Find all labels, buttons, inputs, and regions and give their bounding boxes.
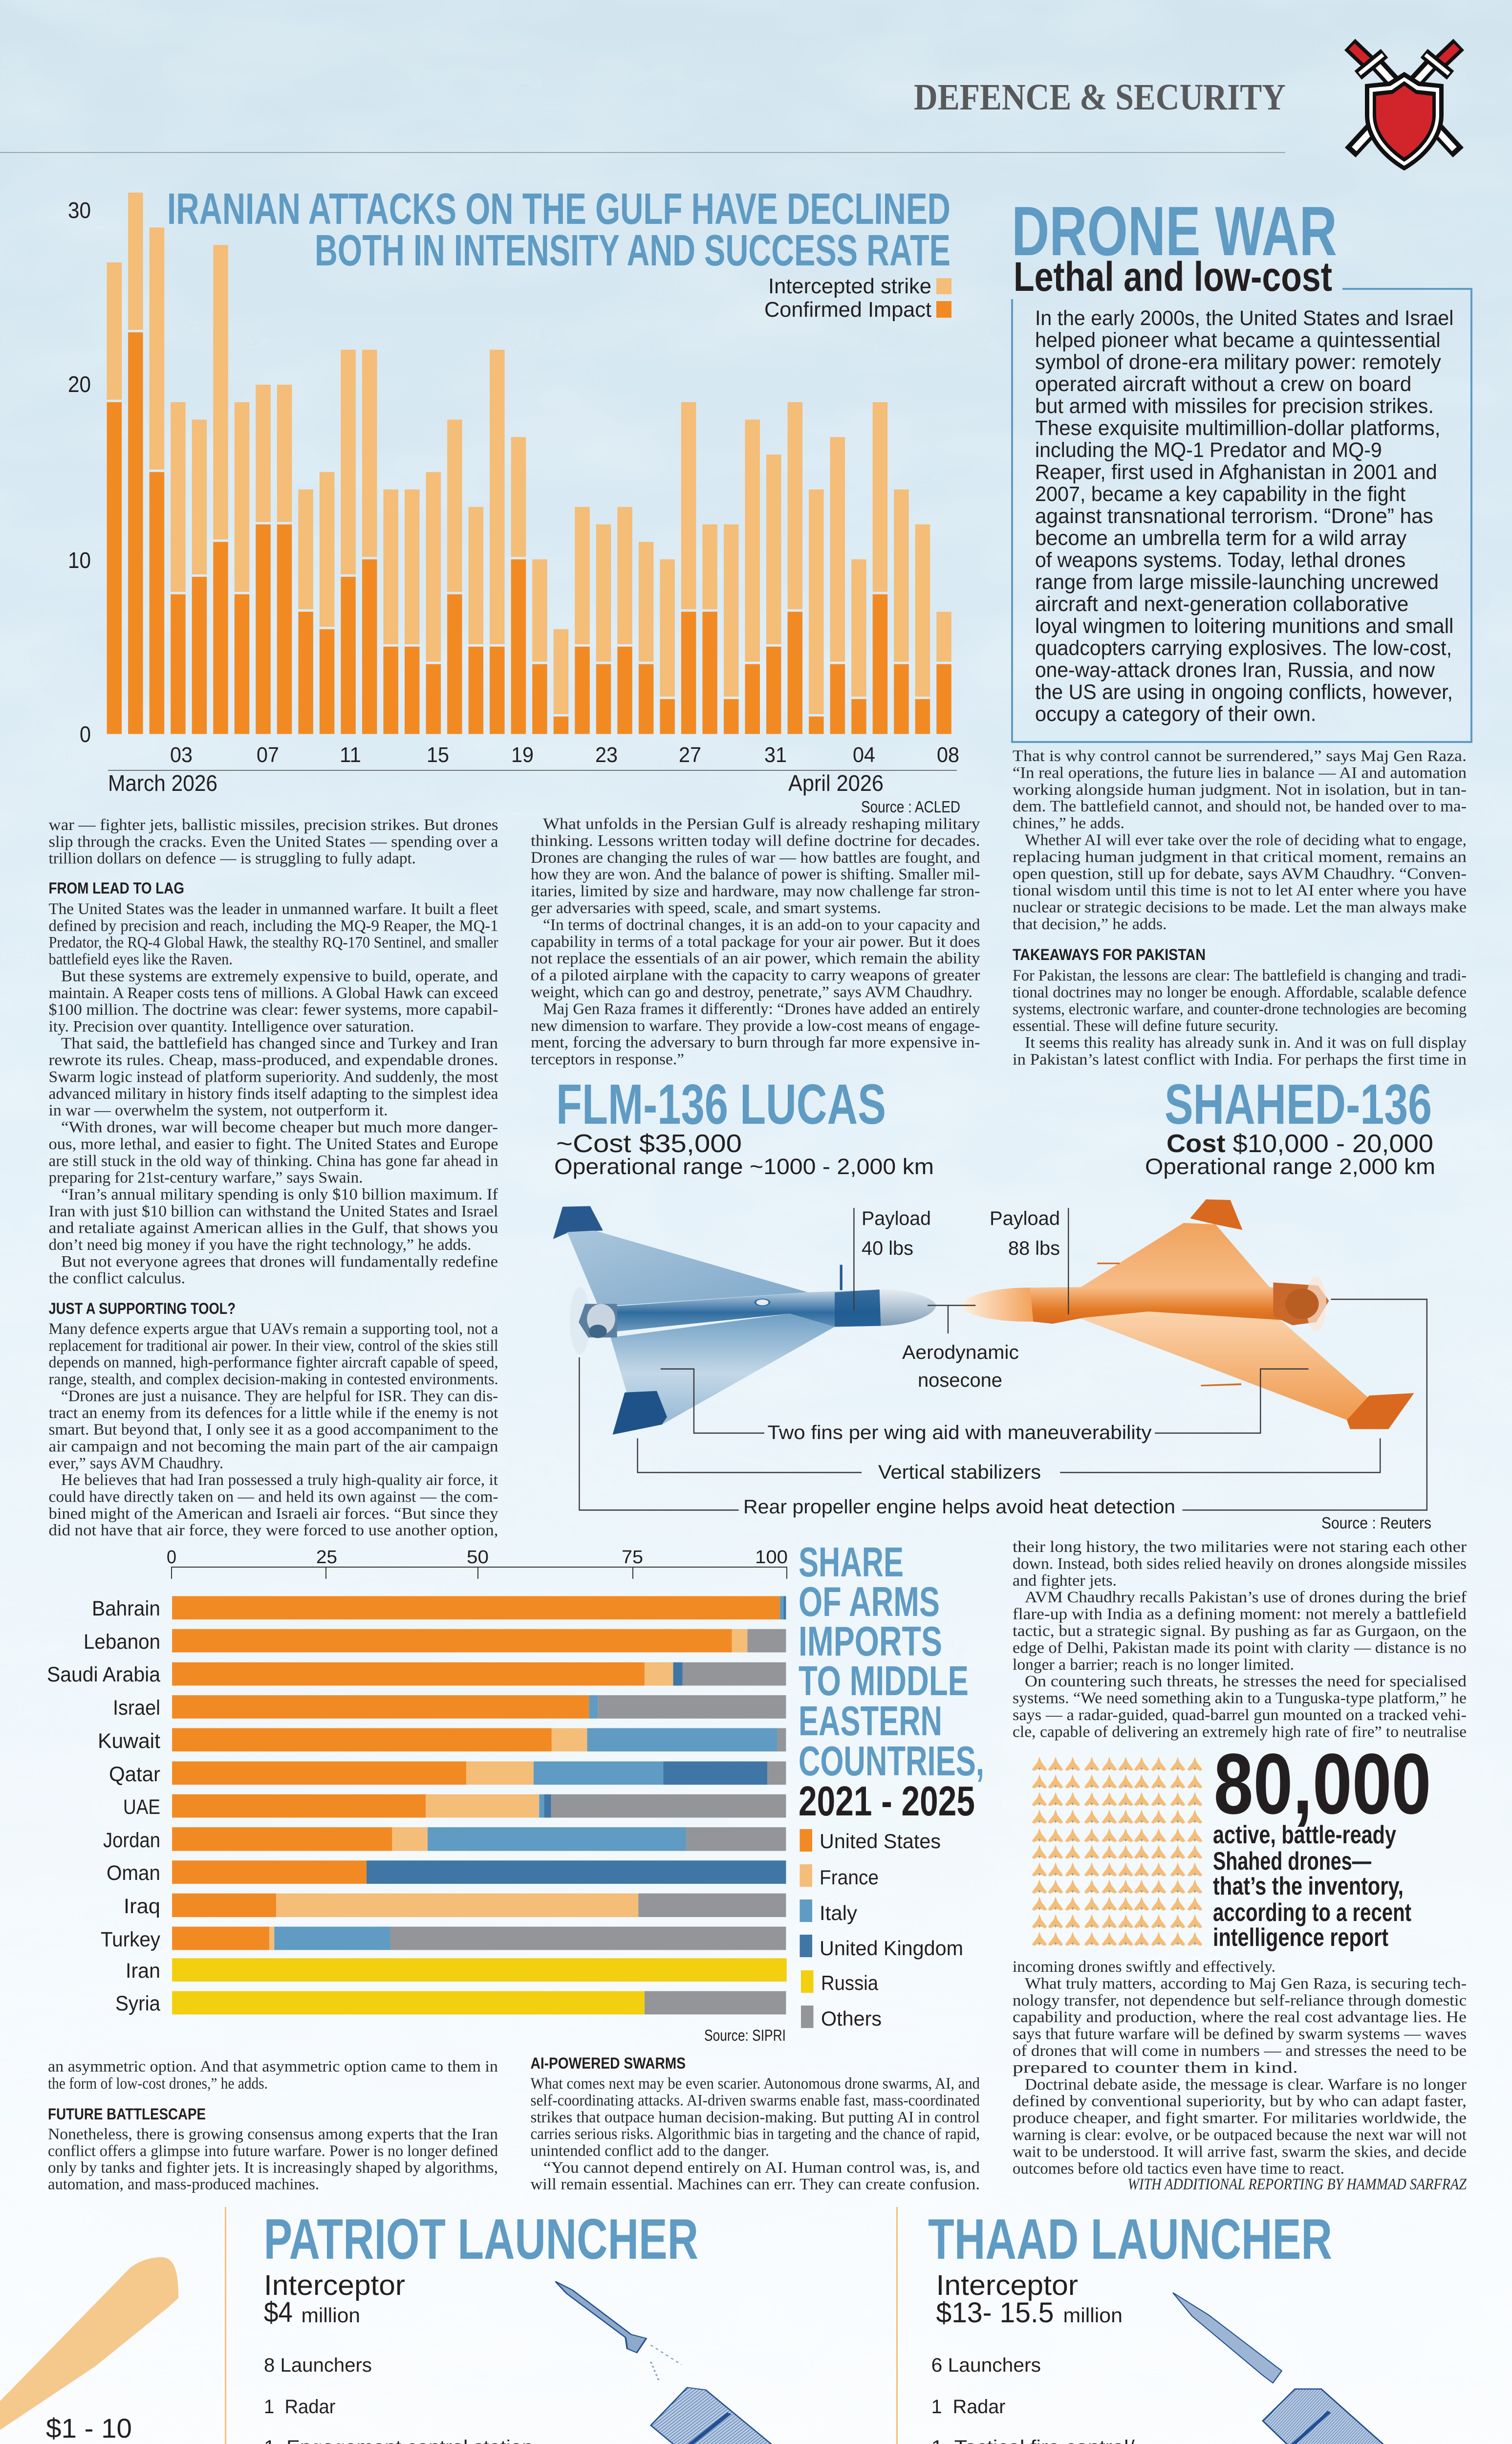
text block: column 3 upper article: dem. The battlefield cannot, and should not, be handed over to ma-	[1013, 798, 1467, 815]
intro text: but armed with missiles for precision strikes.	[1035, 394, 1434, 418]
text block: column 2 lower article: “You cannot depend entirely on AI. Human control was, is, and	[543, 2159, 980, 2177]
panel: Patriot launcher	[253, 2207, 875, 2444]
text block: column 2 upper article: thinking. Lessons written today will define doctrine for decades.	[531, 832, 980, 850]
text block: column 1 upper article: “Drones are just a nuisance. They are helpful for ISR. They can dis-	[61, 1387, 498, 1405]
y axis labels: 30	[68, 197, 91, 223]
chart title: COUNTRIES,	[799, 1738, 984, 1785]
text block: column 3 middle article: down. Instead, both sides relied heavily on drones alongside missiles	[1013, 1555, 1467, 1572]
drone source: Source : Reuters	[1321, 1514, 1431, 1532]
intro text: helped pioneer what became a quintessential	[1035, 328, 1441, 352]
text block: column 1 upper article: in war — overwhelm the system, not outperform it.	[49, 1102, 388, 1119]
intro text: one-way-attack drones Iran, Russia, and now	[1035, 658, 1435, 682]
text block: column 2 lower article	[531, 2054, 980, 2193]
text block: column 1 upper article: But these systems are extremely expensive to build, operate, and	[61, 967, 498, 985]
subheading: future battlescape: FUTURE BATTLESCAPE	[48, 2105, 206, 2123]
text block: column 1 upper article: tract an enemy from its defences for a little while if the enemy is not	[49, 1404, 498, 1422]
intro text: the US are using in ongoing conflicts, however,	[1035, 680, 1453, 704]
intro text	[1035, 306, 1453, 726]
chart legend: France	[820, 1866, 879, 1889]
heading: Shahed-136 specs	[1145, 1072, 1435, 1179]
illustration: THAAD missile	[1173, 2292, 1282, 2383]
text block: column 3 upper article: working alongside human judgment. Not in isolation, but in tan-	[1013, 781, 1467, 799]
x axis date labels: 23	[595, 743, 618, 767]
text block: column 2 upper article: What unfolds in the Persian Gulf is already reshaping military	[543, 815, 980, 833]
battery components list	[264, 2355, 533, 2444]
text block: column 2 upper article: terceptors in response.”	[531, 1051, 684, 1069]
panel: drone comparison FLM-136 LUCAS vs Shahed-136	[553, 1072, 1435, 1532]
text block: column 3 upper article: That is why control cannot be surrendered,” says Maj Gen Raza.	[1013, 747, 1467, 765]
text block: column 3 upper article: in Pakistan’s latest conflict with India. For perhaps the first time in	[1013, 1051, 1467, 1069]
subheading: just a supporting tool: JUST A SUPPORTING TOOL?	[49, 1300, 236, 1317]
chart title: SHARE	[799, 1539, 904, 1586]
text block: column 2 upper article	[531, 815, 980, 1069]
bars: confirmed and intercepted strikes per day	[107, 193, 951, 734]
text block: column 2 lower article: self-coordinating attacks. AI-driven swarms enable fast, mass-coordinated	[531, 2092, 980, 2109]
heading: FLM-136 LUCAS specs	[554, 1072, 934, 1179]
text block: column 3 lower article	[1013, 1958, 1467, 2193]
intro text: of weapons systems. Today, lethal drones	[1035, 548, 1405, 572]
text block: column 3 middle article: AVM Chaudhry recalls Pakistan’s use of drones during the brief	[1025, 1589, 1467, 1606]
text block: column 3 middle article	[1013, 1538, 1467, 1741]
country labels: Bahrain	[92, 1597, 160, 1620]
text block: column 3 middle article: systems. “We need something akin to a Tunguska-type platform,” he	[1013, 1690, 1467, 1707]
text block: column 2 upper article: Maj Gen Raza frames it differently: “Drones have added an entirely	[543, 1000, 980, 1018]
text block: column 3 lower article: warning is clear: evolve, or be outpaced because the next war will not	[1013, 2126, 1467, 2144]
text block: column 1 lower article: automation, and mass-produced machines.	[48, 2176, 319, 2193]
text block: column 1 upper article: did not have that air force, they were forced to use another option,	[49, 1522, 498, 1539]
intro text: range from large missile-launching uncrewed	[1035, 570, 1439, 594]
heading: PATRIOT LAUNCHER	[264, 2207, 698, 2271]
text block: column 3 upper article: open question, still up for debate, says AVM Chaudhry. “Conven-	[1013, 865, 1467, 883]
chart source: Source : ACLED	[861, 798, 960, 816]
text block: column 1 upper article: Many defence experts argue that UAVs remain a supporting tool, not a	[49, 1320, 498, 1338]
chart title: OF ARMS	[799, 1579, 940, 1625]
callout text: that’s the inventory,	[1213, 1872, 1404, 1900]
chart title: IRANIAN ATTACKS ON THE GULF HAVE DECLINED	[167, 185, 950, 234]
subtitle: Lethal and low-cost	[1014, 254, 1332, 300]
chart legend: Intercepted strike	[768, 274, 931, 298]
y axis labels: 20	[68, 371, 91, 397]
country labels: Qatar	[109, 1763, 160, 1786]
text block: column 2 upper article: ment, forcing the adversary to burn through far more expensive in-	[531, 1034, 980, 1051]
x axis date labels: 03	[170, 743, 193, 767]
callout text	[1213, 1821, 1411, 1952]
intro text: In the early 2000s, the United States and Israel	[1035, 306, 1453, 330]
chart title: 2021 - 2025	[799, 1778, 975, 1825]
intro text: Reaper, first used in Afghanistan in 2001 and	[1035, 460, 1437, 484]
panel: laser beam cost	[0, 2257, 178, 2444]
text block: column 2 lower article: strikes that outpace human decision-making. But putting AI in control	[531, 2109, 980, 2126]
y axis labels: 10	[68, 547, 91, 573]
stacked horizontal bars by supplier	[172, 1596, 787, 2014]
text block: column 1 upper article: The United States was the leader in unmanned warfare. It built a fleet	[49, 900, 498, 918]
text block: column 3 upper article: essential. These will define future security.	[1013, 1017, 1278, 1035]
chart legend: Russia	[821, 1971, 879, 1994]
chart legend: United States	[820, 1830, 941, 1853]
label: aerodynamic nosecone	[902, 1342, 1019, 1391]
icon: shield and crossed swords	[1350, 44, 1459, 171]
text block: column 1 upper article: maintain. A Reaper costs tens of millions. A Global Hawk can exceed	[49, 984, 498, 1002]
chart title: IMPORTS	[799, 1618, 942, 1665]
label: rear propeller: Rear propeller engine helps avoid heat detection	[743, 1496, 1175, 1518]
text block: column 2 upper article: of a piloted airplane with the capacity to carry weapons of greater	[531, 967, 980, 984]
illustration: Patriot launcher vehicle	[253, 2387, 875, 2444]
callout text: according to a recent	[1213, 1898, 1411, 1927]
intro text: operated aircraft without a crew on board	[1035, 372, 1411, 396]
text block: column 1 upper article: ever,” says AVM Chaudhry.	[49, 1455, 223, 1472]
text block: column 3 lower article: outcomes before old tactics even have time to react.	[1013, 2160, 1344, 2178]
text block: column 1 upper article: are still stuck in the old way of thinking. China has gone far ahead in	[49, 1152, 498, 1170]
text block: column 3 middle article: longer a barrier; reach is no longer limited.	[1013, 1656, 1294, 1674]
text block: column 1 upper article: bined might of the American and Israeli air forces. “But since they	[49, 1505, 498, 1523]
leader lines	[579, 1208, 1427, 1510]
text block: column 3 lower article: says that future warfare will be defined by swarm systems — waves	[1013, 2026, 1467, 2043]
subheading: AI-powered swarms: AI-POWERED SWARMS	[531, 2054, 686, 2072]
text block: column 1 upper article: trillion dollars on defence — is struggling to fully adapt.	[49, 850, 416, 868]
chart axis: 100	[755, 1547, 788, 1568]
illustration: blue LUCAS drone	[553, 1206, 936, 1435]
x axis date labels: April 2026	[788, 770, 884, 796]
label: payload 88 lbs: 88 lbs	[1008, 1238, 1060, 1259]
divider: orange rule left	[225, 2207, 226, 2444]
text block: column 1 upper article: and retaliate against American allies in the Gulf, that shows you	[49, 1220, 498, 1237]
text block: column 3 upper article: replacing human judgment in that critical moment, remains an	[1013, 848, 1467, 866]
country labels: Kuwait	[98, 1729, 160, 1753]
text block: column 1 upper article: Predator, the RQ-4 Global Hawk, the stealthy RQ-170 Sentinel, and smaller	[49, 934, 498, 952]
intro text: symbol of drone-era military power: remotely	[1035, 350, 1441, 374]
text block: column 3 middle article: flare-up with India as a defining moment: not merely a battlefield	[1013, 1606, 1467, 1623]
text block: column 2 upper article: ger adversaries with speed, scale, and smart systems.	[531, 899, 881, 917]
heading: THAAD LAUNCHER	[928, 2207, 1332, 2271]
text block: column 3 lower article: defined by conventional superiority, but by who can adapt faster,	[1013, 2093, 1467, 2110]
big number: 80,000	[1214, 1736, 1431, 1832]
label: payload 40 lbs: Payload	[862, 1208, 931, 1229]
text block: column 1 upper article: don’t need big money if you have the right technology,” he adds.	[49, 1236, 471, 1254]
text block: column 3 middle article: tactic, but a strategic signal. By pushing as far as Gurgaon, on the	[1013, 1622, 1467, 1640]
interceptor cost	[264, 2269, 405, 2328]
x axis date labels: 31	[764, 743, 787, 767]
intro text: 2007, became a key capability in the fight	[1035, 482, 1405, 506]
label: payload 40 lbs: 40 lbs	[862, 1238, 913, 1259]
text block: column 3 upper article: “In real operations, the future lies in balance — AI and automation	[1013, 764, 1467, 782]
x axis date labels: 04	[853, 743, 875, 767]
heading: Shahed-136 specs: SHAHED-136	[1165, 1072, 1432, 1136]
text block: column 1 upper article: battlefield eyes like the Raven.	[49, 951, 233, 968]
panel: THAAD launcher	[908, 2207, 1465, 2444]
country labels: Lebanon	[84, 1630, 160, 1654]
country labels: Iraq	[124, 1895, 160, 1918]
text block: column 3 middle article: and fighter jets.	[1013, 1572, 1117, 1590]
battery components list: 8 Launchers	[264, 2355, 372, 2376]
label: vertical stabilizers: Vertical stabilizers	[878, 1462, 1041, 1483]
intro text: against transnational terrorism. “Drone” has	[1035, 504, 1433, 528]
text block: column 1 upper article: advanced military in history finds itself adapting to the simplest idea	[49, 1085, 498, 1103]
label: payload 88 lbs	[990, 1208, 1060, 1259]
subheading: takeaways for Pakistan: TAKEAWAYS FOR PAKISTAN	[1013, 946, 1206, 963]
country labels: UAE	[123, 1795, 160, 1819]
illustration: THAAD launcher vehicle	[908, 2389, 1465, 2444]
text block: column 1 lower article: only by tanks and fighter jets. It is increasingly shaped by algorithms,	[48, 2159, 498, 2177]
byline: WITH ADDITIONAL REPORTING BY HAMMAD SARFRAZ	[1128, 2176, 1467, 2193]
text block: column 2 upper article: new dimension to warfare. They provide a low-cost means of engage-	[531, 1017, 980, 1035]
callout text: intelligence report	[1213, 1923, 1388, 1952]
text block: column 3 upper article: tional doctrines may no longer be enough. Affordable, scalable defence	[1013, 983, 1467, 1001]
text block: column 1 upper article: slip through the cracks. Even the United States — spending over a	[49, 833, 498, 851]
text block: column 1 upper article: “Iran’s annual military spending is only $10 billion maximum. If	[61, 1186, 498, 1203]
text block: column 1 lower article: conflict offers a glimpse into future warfare. Power is no longer defined	[48, 2142, 498, 2160]
text block: column 3 lower article: nology transfer, not dependence but self-reliance through domestic	[1013, 1992, 1467, 2009]
chart legend: Italy	[820, 1901, 857, 1924]
divider: orange rule right	[896, 2207, 898, 2444]
text block: column 2 upper article: itaries, limited by size and hardware, may now challenge far stron-	[531, 883, 980, 900]
chart title	[167, 185, 950, 275]
heading: FLM-136 LUCAS specs: Operational range ~1000 - 2,000 km	[554, 1154, 934, 1179]
panel: 80,000 Shahed drones callout	[1032, 1736, 1431, 1952]
text block: column 2 lower article: will remain essential. Machines can err. They can create confusion.	[531, 2176, 980, 2193]
text block: column 2 lower article: What comes next may be even scarier. Autonomous drone swarms, AI, and	[531, 2075, 980, 2093]
label: two fins: Two fins per wing aid with maneuverability	[767, 1422, 1151, 1443]
y axis labels: 0	[80, 721, 91, 747]
text block: column 3 upper article: nuclear or strategic decisions to be made. Let the man always make	[1013, 899, 1467, 916]
text block: column 3 upper article: that decision,” he adds.	[1013, 916, 1167, 933]
text block: column 2 lower article: carries serious risks. Algorithmic bias in targeting and the chance of rapid,	[531, 2125, 980, 2143]
callout text: Shahed drones—	[1213, 1847, 1371, 1876]
battery components list: 6 Launchers	[931, 2355, 1041, 2376]
text block: column 1 lower article: the form of low-cost drones,” he adds.	[48, 2075, 268, 2093]
callout text: active, battle-ready	[1213, 1821, 1396, 1849]
text block: column 2 upper article: how they are won. And the balance of power is shifting. Smaller mil-	[531, 866, 980, 883]
text block: column 3 middle article: cle, capable of delivering an extremely high rate of fire” to neutralise	[1013, 1723, 1467, 1741]
battery components list: 1 Radar	[931, 2396, 1006, 2418]
panel: share of arms imports chart	[47, 1539, 984, 2044]
laser cost text	[46, 2413, 178, 2444]
laser cost text: $1 - 10	[46, 2413, 132, 2444]
chart title	[799, 1539, 984, 1825]
x axis date labels: March 2026	[108, 770, 217, 796]
text block: column 1 upper article: air campaign and not becoming the main part of the air campaign	[49, 1438, 498, 1456]
interceptor cost	[936, 2269, 1123, 2329]
header title: DEFENCE & SECURITY	[914, 77, 1286, 118]
interceptor cost: million	[1063, 2304, 1123, 2327]
interceptor cost: $13- 15.5	[936, 2297, 1054, 2329]
text block: column 1 upper article: “With drones, war will become cheaper but much more danger-	[61, 1119, 498, 1136]
intro text: aircraft and next-generation collaborative	[1035, 592, 1408, 616]
illustration: orange Shahed drone	[961, 1200, 1414, 1429]
battery components list	[931, 2355, 1173, 2444]
interceptor cost: Interceptor	[264, 2269, 405, 2301]
label: payload 88 lbs: Payload	[990, 1208, 1060, 1229]
chart axis: 50	[467, 1547, 489, 1568]
interceptor cost: $4	[264, 2296, 293, 2328]
main title: DRONE WAR	[1012, 193, 1337, 270]
text block: column 1 upper article: the conflict calculus.	[49, 1270, 185, 1287]
panel: Iranian attacks stacked bar chart	[68, 185, 960, 816]
text block: column 2 upper article: not replace the essentials of an air power, which remain the ability	[531, 950, 980, 967]
x axis date labels: 07	[257, 743, 279, 767]
chart legend	[764, 274, 951, 322]
chart title: BOTH IN INTENSITY AND SUCCESS RATE	[315, 226, 950, 275]
chart legend: United Kingdom	[820, 1937, 963, 1960]
country labels	[47, 1597, 160, 2015]
panel: Drone War intro box	[1012, 193, 1471, 742]
intro text: including the MQ-1 Predator and MQ-9	[1035, 438, 1382, 462]
text block: column 1 upper article: But not everyone agrees that drones will fundamentally redefine	[61, 1253, 498, 1270]
text block: column 1 upper article: That said, the battlefield has changed since and Turkey and Iran	[61, 1035, 498, 1052]
chart axis: 75	[622, 1547, 643, 1568]
text block: column 3 lower article: prepared to counter them in kind.	[1013, 2059, 1298, 2076]
text block: column 1 upper article: Iran with just $10 billion can withstand the United States and Israel	[49, 1202, 498, 1220]
text block: column 3 lower article: of drones that will come in numbers — and stresses the need to be	[1013, 2042, 1467, 2060]
text block: column 3 lower article: produce cheaper, and fight smarter. For militaries worldwide, the	[1013, 2110, 1467, 2127]
battery components list: 1 Radar	[264, 2396, 335, 2418]
text block: column 3 upper article: It seems this reality has already sunk in. And it was on full display	[1025, 1034, 1467, 1052]
intro text: become an umbrella term for a wild array	[1035, 526, 1407, 550]
text block: column 3 lower article: wait to be understood. It will arrive fast, swarm the skies, and decide	[1013, 2143, 1467, 2160]
text block: column 1 upper article: preparing for 21st-century warfare,” says Swain.	[49, 1169, 363, 1187]
country labels: Saudi Arabia	[47, 1663, 160, 1686]
country labels: Oman	[107, 1861, 160, 1885]
interceptor cost: Interceptor	[936, 2269, 1078, 2301]
chart source: Source: SIPRI	[704, 2027, 786, 2044]
x axis date labels	[108, 743, 959, 796]
text block: column 2 upper article: “In terms of doctrinal changes, it is an add-on to your capacity and	[543, 916, 980, 934]
text block: column 1 lower article: an asymmetric option. And that asymmetric option came to them in	[48, 2058, 498, 2075]
text block: column 1 upper article: defined by precision and reach, including the MQ-9 Reaper, the MQ-1	[49, 917, 498, 935]
x axis date labels: 19	[511, 743, 534, 767]
heading: FLM-136 LUCAS specs: ~Cost $35,000	[556, 1130, 742, 1158]
text block: column 2 upper article: capability in terms of a total package for your air power. But it does	[531, 933, 980, 951]
text block: column 3 middle article: says — a radar-guided, quad-barrel gun mounted on a tracked vehi-	[1013, 1706, 1467, 1724]
text block: column 3 upper article: tional wisdom until this time is not to let AI enter where you have	[1013, 882, 1467, 899]
intro text: occupy a category of their own.	[1035, 702, 1316, 726]
text block: column 1 upper article: He believes that had Iran possessed a truly high-quality air force, it	[61, 1471, 498, 1489]
text block: column 2 upper article: weight, which can go and destroy, penetrate,” says AVM Chaudhry.	[531, 983, 972, 1001]
text block: column 3 upper article	[1013, 747, 1467, 1069]
text block: column 3 upper article: systems, electronic warfare, and counter-drone technologies are becoming	[1013, 1001, 1467, 1018]
illustration: Patriot missile	[556, 2281, 682, 2381]
country labels: Israel	[113, 1696, 160, 1720]
text block: column 1 upper article: depends on manned, high-performance fighter aircraft capable of speed,	[49, 1354, 498, 1372]
chart legend: Others	[821, 2007, 882, 2030]
text block: column 3 lower article: Doctrinal debate aside, the message is clear. Warfare is no longer	[1025, 2076, 1467, 2094]
x axis date labels: 27	[679, 743, 701, 767]
y axis labels	[68, 197, 91, 747]
text block: column 3 lower article: incoming drones swiftly and effectively.	[1013, 1958, 1275, 1976]
text block: column 1 upper article: range, stealth, and complex decision-making in contested environments.	[49, 1371, 498, 1388]
country labels: Iran	[126, 1959, 160, 1983]
text block: column 1 upper article: war — fighter jets, ballistic missiles, precision strikes. But drones	[49, 816, 498, 834]
text block: column 3 upper article: For Pakistan, the lessons are clear: The battlefield is changing and tradi-	[1013, 967, 1467, 984]
text block: column 3 upper article: Whether AI will ever take over the role of deciding what to engage,	[1025, 831, 1467, 849]
text block: column 1 upper article: Swarm logic instead of platform superiority. And suddenly, the most	[49, 1069, 498, 1086]
text block: column 3 lower article: What truly matters, according to Maj Gen Raza, is securing tech-	[1025, 1975, 1467, 1992]
text block: column 3 middle article: their long history, the two militaries were not staring each other	[1013, 1538, 1467, 1556]
text block: column 1 upper article: $100 million. The doctrine was clear: fewer systems, more capabil-	[49, 1001, 498, 1019]
text block: column 1 lower article	[48, 2058, 498, 2193]
subheading: from lead to lag: FROM LEAD TO LAG	[49, 879, 184, 897]
country labels: Turkey	[101, 1928, 160, 1951]
label: aerodynamic nosecone: nosecone	[918, 1370, 1002, 1391]
text block: column 3 lower article: capability and production, where the real cost advantage lies. He	[1013, 2008, 1467, 2026]
intro text: loyal wingmen to loitering munitions and small	[1035, 614, 1453, 638]
chart title: TO MIDDLE	[799, 1658, 969, 1704]
chart axis	[167, 1547, 788, 1579]
text block: column 3 upper article: chines,” he adds.	[1013, 815, 1124, 832]
chart axis: 0	[167, 1547, 176, 1568]
text block: column 1 upper article: could have directly taken on — and held its own against — the com-	[49, 1488, 498, 1506]
country labels: Syria	[115, 1992, 160, 2015]
chart title: EASTERN	[799, 1698, 942, 1745]
label: payload 40 lbs	[862, 1208, 931, 1259]
x axis date labels: 15	[427, 743, 449, 767]
chart legend: Confirmed Impact	[764, 298, 931, 322]
x axis date labels: 08	[937, 743, 959, 767]
x axis date labels: 11	[340, 743, 361, 767]
text block: column 2 lower article: unintended conflict add to the danger.	[531, 2142, 769, 2160]
heading: Shahed-136 specs: Cost $10,000 - 20,000	[1166, 1130, 1433, 1158]
text block: column 1 upper article	[49, 816, 498, 1539]
text block: column 3 middle article: On countering such threats, he stresses the need for specialised	[1025, 1673, 1467, 1690]
text block: column 1 upper article: rewrote its rules. Cheap, mass-produced, and expendable drones.	[49, 1051, 498, 1069]
interceptor cost: million	[301, 2304, 360, 2327]
chart axis: 25	[316, 1547, 337, 1568]
text block: column 2 upper article: Drones are changing the rules of war — how battles are fought, and	[531, 849, 980, 867]
intro text: quadcopters carrying explosives. The low-cost,	[1035, 636, 1452, 660]
country labels: Jordan	[103, 1829, 160, 1852]
illustration: laser beam	[0, 2257, 178, 2430]
text block: column 1 upper article: ity. Precision over quantity. Intelligence over saturation.	[49, 1018, 414, 1035]
text block: column 3 middle article: edge of Delhi, Pakistan made its point with clarity — distance is no	[1013, 1639, 1467, 1657]
text block: column 1 upper article: replacement for traditional air power. In their view, control of the skies still	[49, 1337, 498, 1354]
pictogram: grid of drone icons	[1032, 1757, 1202, 1946]
chart legend	[799, 1829, 963, 2030]
text block: column 1 upper article: smart. But beyond that, I only see it as a good accompaniment to the	[49, 1421, 498, 1439]
text block: column 1 lower article: Nonetheless, there is growing consensus among experts that the Iran	[48, 2126, 498, 2143]
intro text: These exquisite multimillion-dollar platforms,	[1035, 416, 1441, 440]
label: aerodynamic nosecone: Aerodynamic	[902, 1342, 1019, 1363]
text block: column 1 upper article: ous, more lethal, and easier to fight. The United States and Europe	[49, 1135, 498, 1153]
heading: FLM-136 LUCAS specs: FLM-136 LUCAS	[556, 1072, 886, 1136]
heading: Shahed-136 specs: Operational range 2,000 km	[1145, 1154, 1435, 1179]
